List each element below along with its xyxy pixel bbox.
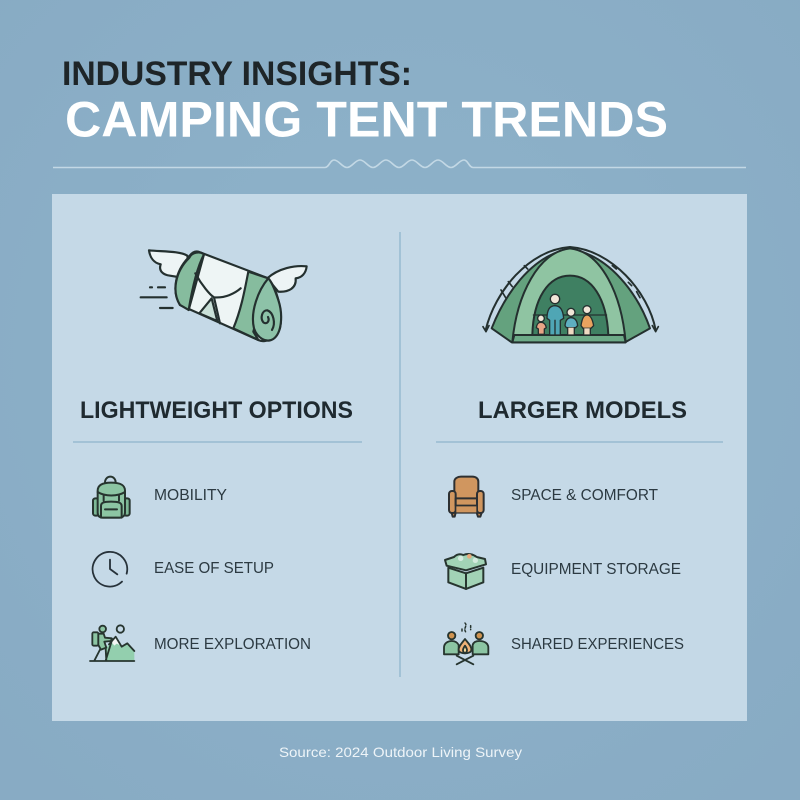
icon: family tent bbox=[483, 247, 658, 342]
icon: armchair bbox=[449, 477, 484, 517]
source note: Source: 2024 Outdoor Living Survey bbox=[279, 744, 522, 760]
title: industry insights: INDUSTRY INSIGHTS: bbox=[62, 55, 412, 93]
text: equipment storage: EQUIPMENT STORAGE bbox=[511, 561, 681, 578]
icon: hiker and mountains bbox=[90, 625, 134, 661]
wavy title divider bbox=[53, 160, 746, 168]
text: space and comfort: SPACE & COMFORT bbox=[511, 487, 658, 504]
heading: larger models: LARGER MODELS bbox=[478, 397, 687, 424]
text: shared experiences: SHARED EXPERIENCES bbox=[511, 636, 684, 653]
title: camping tent trends: CAMPING TENT TRENDS bbox=[65, 92, 668, 148]
text: ease of setup: EASE OF SETUP bbox=[154, 560, 274, 577]
icon: winged bedroll bbox=[141, 250, 307, 341]
icon: clock bbox=[93, 552, 127, 587]
icon: backpack bbox=[93, 477, 130, 518]
text: mobility: MOBILITY bbox=[154, 487, 227, 504]
heading: lightweight options: LIGHTWEIGHT OPTIONS bbox=[80, 397, 353, 424]
icon: storage box bbox=[445, 554, 486, 589]
icon: campfire gathering bbox=[444, 623, 488, 664]
main panel bbox=[52, 194, 747, 721]
text: more exploration: MORE EXPLORATION bbox=[154, 636, 311, 653]
